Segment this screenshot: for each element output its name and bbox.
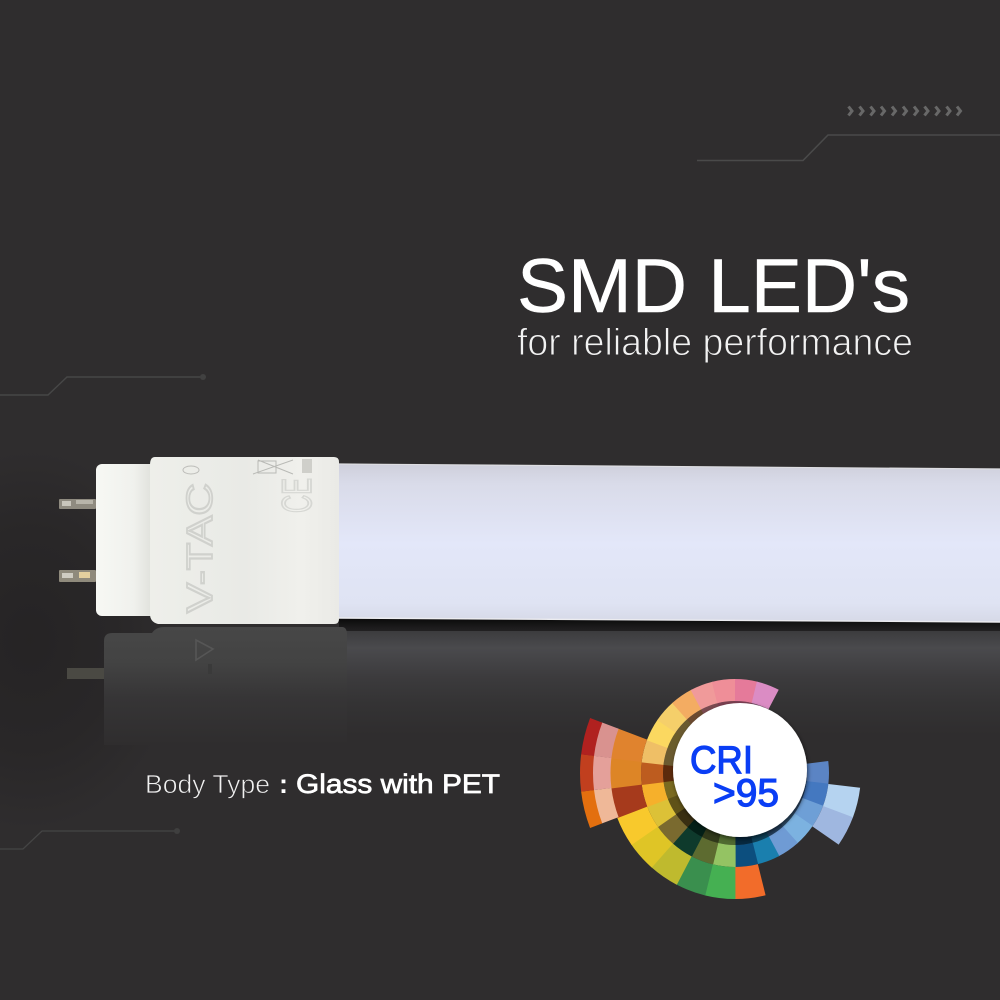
ring: pink extension: [563, 601, 907, 945]
tube highlight edges: [339, 464, 1000, 469]
ring: main colours: [618, 656, 852, 890]
end cap base: [96, 464, 156, 616]
reflection of tube on the floor: [67, 618, 1000, 745]
CRI colour wheel: [543, 581, 927, 965]
ring: red extension: [543, 581, 927, 965]
CRI value: >95: [713, 772, 779, 815]
CRI value: [690, 739, 779, 815]
CRI white disc: [673, 703, 807, 837]
subtitle: for reliable performance: [517, 322, 913, 364]
body type label: :: [279, 769, 288, 799]
body type label: [145, 769, 500, 799]
ring: outer colours: [580, 618, 890, 928]
registered mark: [183, 466, 199, 474]
metal pin: upper: [59, 499, 96, 509]
rectangle mark: [302, 459, 312, 473]
body type label: Body Type: [145, 769, 270, 799]
end cap sleeve: [150, 457, 339, 624]
brand mark on cap: V-TAC: [179, 483, 220, 613]
metal pin: lower: [59, 570, 96, 582]
chevron row: top right: [848, 106, 960, 116]
circuit line: top right: [697, 135, 1000, 160]
title: SMD LED's: [517, 244, 910, 329]
crossed bin symbol: [253, 460, 293, 474]
LED tube: [59, 457, 1000, 624]
body type label: Glass with PET: [296, 769, 500, 799]
circuit line: middle left: [0, 374, 206, 395]
circuit line: lower left: [0, 828, 180, 849]
tube body: [339, 464, 1000, 622]
CE mark: CE: [273, 478, 320, 513]
ring: dark inner band: [650, 688, 820, 858]
CRI value: CRI: [690, 739, 753, 782]
